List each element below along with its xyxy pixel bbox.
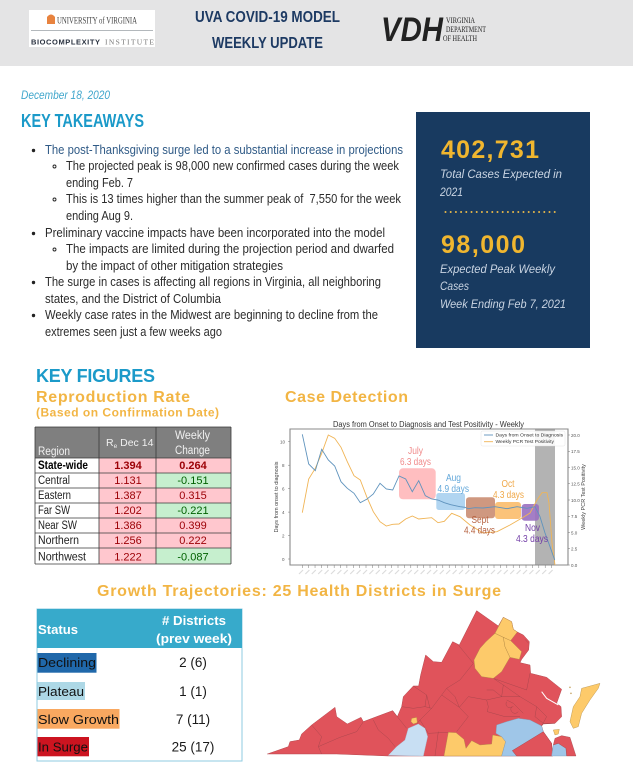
district: plateau [388,724,428,756]
table: reproduction rate: Central [38,475,70,487]
table: district status [37,609,242,761]
table: district status: Status [38,622,78,637]
district: Loudoun (slow growth) [495,617,517,641]
logo: VDH: VDH [381,11,444,49]
right axis: 12.5 [571,482,580,486]
row: slow growth: 7 (11) [176,712,210,727]
logo: UVA Biocomplexity Institute: BIOCOMPLEXITY [31,38,100,46]
right axis: 10.0 [571,498,580,503]
text block: takeaways list: states, and the District of Columbia [45,292,221,306]
text block: takeaways list: ending Aug 9. [66,209,133,223]
district: Norfolk (declining) [552,743,567,756]
heading: reproduction rate [36,389,219,420]
heading: growth trajectories: Growth Trajectories: 25 Health Districts in Surge [97,583,501,600]
stat: total cases: 402,731 [441,136,539,164]
table: reproduction rate: Northern [38,535,79,547]
stat: peak weekly cases: Cases [440,281,469,293]
row: plateau: Plateau [38,684,84,699]
logo: UVA Biocomplexity Institute [29,10,155,47]
header band [0,0,633,66]
table: reproduction rate: 1.202 [114,505,142,517]
table: reproduction rate: Dec 14 [117,437,154,449]
heading: key takeaways: KEY TAKEAWAYS [21,111,144,131]
table: reproduction rate: State-wide [38,460,88,472]
table: reproduction rate: -0.221 [177,505,209,517]
table: reproduction rate: e [114,443,118,450]
district: Crater (declining) [496,718,543,756]
right axis: 0.0 [571,563,578,568]
chart: onset to diagnosis and test positivity [274,420,587,574]
panel: headline numbers [416,112,590,348]
heading: key figures: KEY FIGURES [36,366,155,386]
stat: total cases: 2021 [439,187,463,199]
heading: reproduction rate: Reproduction Rate [36,389,190,406]
table: district status: # Districts [162,613,226,628]
row: declining: 2 (6) [179,655,207,670]
callout: July: 6.3 days [400,457,431,468]
table: reproduction rate: -0.087 [177,552,209,564]
right axis: Weekly PCR Test Positivity [581,464,587,530]
text block: takeaways list: by the impact of other mitigation strategies [66,259,283,273]
callout: Sept: Sept [472,515,489,526]
district: Rappahannock area (slow growth) [474,633,510,678]
left axis: 2 [282,533,285,538]
title: WEEKLY UPDATE [212,35,323,52]
table: reproduction rate: Far SW [38,505,70,517]
table: district status: (prev week) [156,631,232,646]
date: December 18, 2020 [21,88,110,102]
table: reproduction rate: Eastern [38,490,71,502]
row: plateau [38,682,207,700]
logo: VDH: DEPARTMENT [446,25,486,34]
text block: takeaways list: The post-Thanksgiving surge led to a substantial increase in projections [45,143,403,157]
district: small city (slow growth) [411,717,417,724]
line: test positivity [302,435,555,565]
district: Virginia Beach [553,736,576,756]
district: Prince William (slow growth) [503,637,522,659]
left axis: 0 [282,557,285,562]
text block: takeaways list [32,143,403,339]
right axis: 2.5 [571,546,578,552]
right axis: 17.5 [571,449,580,454]
highlight boxes [399,468,539,521]
stat: peak weekly cases: 98,000 [441,231,525,259]
text block: takeaways list: ending Feb. 7 [66,176,133,190]
table: reproduction rate: 0.315 [179,490,207,502]
table: reproduction rate: 0.399 [179,520,207,532]
table: reproduction rate [35,427,231,564]
callout: July [400,446,431,468]
right axis: 7.5 [571,514,578,519]
row: in surge: 25 (17) [172,740,214,755]
logo: UVA Biocomplexity Institute: UNIVERSITY of VIRGINIA [57,16,137,26]
left axis [274,440,290,562]
row: declining [38,653,207,673]
row: slow growth [38,709,210,729]
callout: Sept: 4.4 days [464,526,495,536]
table: reproduction rate: Near SW [38,520,77,532]
text block: takeaways list: Weekly case rates in the Midwest are beginning to decline from the [45,308,378,322]
legend: Weekly PCR Test Positivity [496,439,555,444]
text block: takeaways list: Preliminary vaccine impacts have been incorporated into the model [45,226,385,240]
right axis: 20.0 [571,433,580,438]
chart: onset to diagnosis and test positivity: Days from Onset to Diagnosis and Test Positivity - Weekly [333,420,524,429]
heading: reproduction rate: (Based on Confirmation Date) [36,406,219,420]
table: reproduction rate: 1.386 [114,520,142,532]
callout: Oct: Oct [502,479,515,490]
callout: Aug: 4.9 days [438,484,469,495]
callout: Aug: Aug [446,473,461,484]
table: reproduction rate: Northwest [38,552,87,564]
callout: Sept [464,515,495,536]
heading: case detection: Case Detection [285,389,408,406]
text block: takeaways list: The projected peak is 98,000 new confirmed cases during the week [66,159,400,173]
row: in surge [38,737,214,756]
callout: Nov: Nov [525,523,540,534]
table: reproduction rate: 1.131 [114,475,142,487]
right axis [568,433,587,568]
legend [481,431,565,446]
callout: Nov: 4.3 days [516,534,548,545]
logo: VDH [381,11,486,49]
row: in surge: In Surge [38,740,88,755]
logo: VDH: VIRGINIA [446,16,475,25]
logo: UVA Biocomplexity Institute: INSTITUTE [105,38,154,46]
row: declining: Declining [38,655,96,670]
district: southside (slow growth) [444,732,506,756]
table: reproduction rate: 0.264 [179,460,208,472]
left axis: 10 [280,440,286,444]
table: reproduction rate: 1.222 [114,552,142,564]
row: plateau: 1 (1) [179,684,207,699]
table: reproduction rate: 0.222 [179,535,207,547]
table: reproduction rate: -0.151 [177,475,209,487]
legend: Days from Onset to Diagnosis [496,432,564,438]
stat: peak weekly cases: Week Ending Feb 7, 2021 [440,299,566,311]
table: reproduction rate: Region [38,446,70,458]
line: days to diagnosis [302,434,555,560]
text block: takeaways list: The surge in cases is affecting all regions in Virginia, all neighboring [45,275,381,289]
table: reproduction rate: 1.387 [114,490,142,502]
district: Hampton (slow growth) [553,729,559,735]
district: Western Tidewater [512,732,553,756]
text block: takeaways list: This is 13 times higher than the summer peak of 7,550 for the week [66,192,402,206]
callout: Nov [516,523,548,545]
right axis: 5.0 [571,530,578,535]
stat: total cases: Total Cases Expected in [440,169,562,181]
right axis: 15.0 [571,465,580,470]
table: reproduction rate: Change [175,445,210,457]
callout: July: July [408,446,423,457]
text block: takeaways list: extremes seen just a few weeks ago [45,325,222,339]
title [195,9,340,52]
map: Virginia health districts [267,611,600,756]
left axis: 4 [282,510,285,515]
callout: Aug [438,473,469,495]
logo: VDH: OF HEALTH [443,34,477,43]
table: reproduction rate: 1.256 [114,535,142,547]
left axis: 8 [282,463,285,468]
stat: peak weekly cases [440,231,566,311]
left axis: 6 [282,486,285,491]
district: Eastern Shore (slow growth) [570,683,600,728]
row: slow growth: Slow Growth [38,712,119,727]
table: reproduction rate: R [106,437,114,449]
table: reproduction rate: Weekly [175,430,210,442]
table: reproduction rate: 1.394 [114,460,143,472]
stat: total cases [439,136,562,199]
text block: takeaways list: The impacts are limited during the projection period and dwarfed [66,242,394,256]
left axis: Days from onset to diagnosis [274,461,280,532]
title: UVA COVID-19 MODEL [195,9,340,26]
stat: peak weekly cases: Expected Peak Weekly [440,264,556,276]
callout: Oct: 4.3 days [493,490,524,501]
callout: Oct [493,479,524,501]
